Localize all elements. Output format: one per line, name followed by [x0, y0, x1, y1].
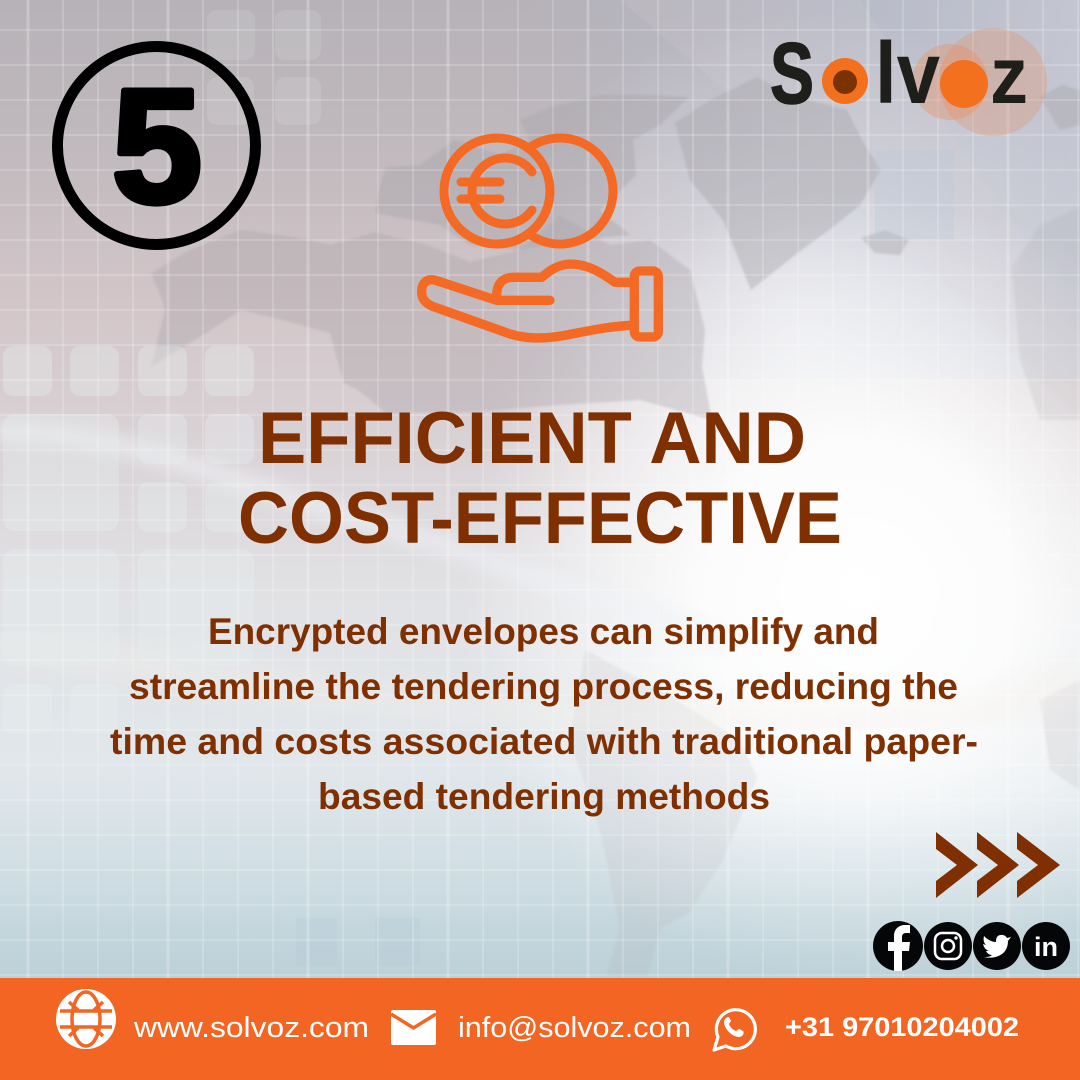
decorative rounded tiles, top — [207, 10, 321, 125]
front coin — [444, 138, 550, 244]
decorative rounded tiles, left — [3, 346, 254, 734]
phone number: +31 97010204002 — [785, 1012, 1019, 1042]
website: www.solvoz.com — [133, 1012, 369, 1044]
Africa — [1040, 680, 1080, 790]
body text: based tendering methods — [318, 776, 770, 817]
icon: envelope — [391, 1010, 436, 1045]
open hand — [422, 264, 658, 338]
icon: whatsapp — [714, 1010, 755, 1050]
Solvoz logo: S — [770, 26, 814, 122]
back coin — [528, 138, 613, 244]
decorative blue screens — [296, 150, 954, 965]
icon: linkedin — [1022, 922, 1070, 970]
North American mainland — [151, 215, 712, 420]
body text: streamline the tendering process, reducing the — [129, 666, 958, 707]
icon: facebook — [873, 921, 923, 971]
Solvoz logo: z — [990, 31, 1028, 121]
body text: Encrypted envelopes can simplify and — [208, 611, 879, 652]
euro sign — [461, 158, 532, 224]
social icons — [873, 921, 1070, 971]
icon: globe — [56, 989, 116, 1049]
Arctic islands — [375, 95, 689, 250]
South America — [570, 650, 757, 977]
step number badge: 5 — [112, 56, 202, 237]
background world map — [151, 77, 1080, 977]
Iceland — [861, 230, 909, 255]
Europe — [1012, 207, 1080, 420]
title: COST-EFFECTIVE — [238, 478, 842, 559]
Solvoz logo — [770, 25, 1047, 136]
title — [238, 398, 842, 559]
arrows: next — [936, 832, 1060, 898]
icon: twitter — [973, 922, 1021, 970]
Scandinavia sliver — [1040, 85, 1080, 130]
email: info@solvoz.com — [458, 1012, 691, 1044]
title: EFFICIENT AND — [258, 398, 806, 479]
body text — [110, 611, 978, 817]
icon: instagram — [924, 922, 972, 970]
icon: euro coins over open hand — [422, 138, 658, 338]
Greenland — [675, 77, 881, 290]
body text: time and costs associated with traditional paper- — [110, 721, 978, 762]
step number badge — [58, 46, 256, 244]
footer bar — [0, 978, 1080, 1080]
Solvoz logo: lv — [875, 25, 940, 122]
icon: linkedin: in — [1034, 932, 1058, 962]
decorative light streaks — [0, 432, 1080, 722]
